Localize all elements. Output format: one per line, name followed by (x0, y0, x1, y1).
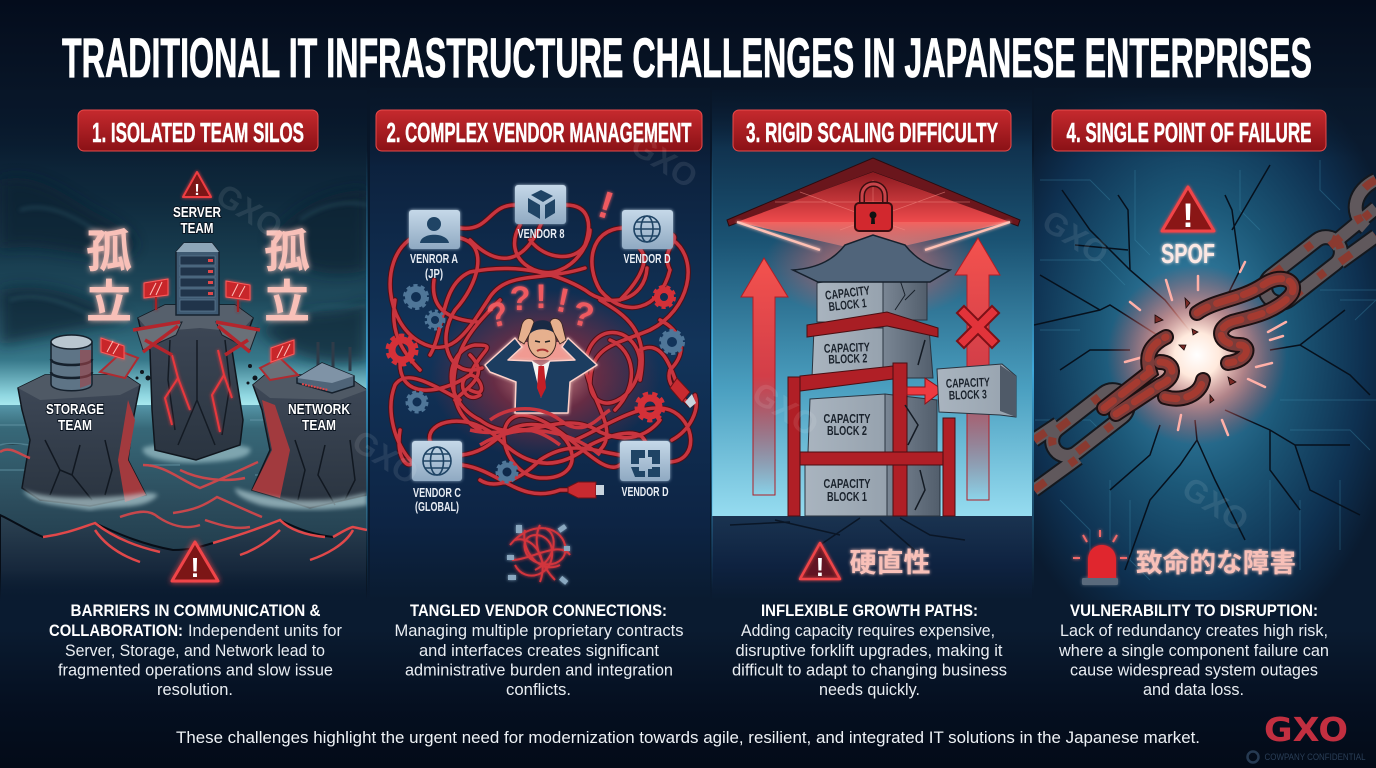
label: fatal failure: 致命的な障害 (1136, 548, 1296, 578)
heading badge 1: 1. ISOLATED TEAM SILOS (92, 117, 304, 148)
text block: inflexible: disruptive forklift upgrades, making it (736, 642, 1003, 660)
watermarks (210, 126, 1255, 539)
label: storage team: STORAGE (46, 401, 104, 418)
block 1 upper: BLOCK 1 (828, 296, 867, 314)
confusion marks: ! (535, 278, 547, 316)
block 3: CAPACITY (946, 375, 991, 391)
confusion marks: ? (510, 280, 530, 318)
gears (388, 286, 683, 482)
block 1 bottom: CAPACITY (824, 477, 871, 491)
block 2 lower: BLOCK 2 (827, 424, 867, 438)
text block: vulnerability: and data loss. (1143, 681, 1244, 699)
kanji right: 孤 (264, 225, 310, 277)
vendor box: C (412, 441, 462, 514)
icon: warning (1162, 187, 1214, 235)
label: SPOF: SPOF (1161, 238, 1215, 269)
block 2 upper (812, 325, 933, 378)
chain: steel links (1034, 180, 1376, 490)
watermarks: GXO (346, 423, 425, 492)
block 3 (937, 364, 1016, 417)
cracks (1034, 165, 1370, 570)
man glow (430, 290, 660, 460)
heading badge 1 (78, 110, 318, 151)
cables behind (390, 205, 696, 494)
vendor box: D top: VENDOR D (624, 252, 670, 266)
text block: tangled: conflicts. (506, 681, 571, 699)
tower cracks (905, 340, 925, 510)
icon: large warning (172, 542, 218, 583)
block 1 upper (817, 272, 927, 322)
foam behind islands (143, 442, 250, 463)
text block: barriers: fragmented operations and slow issue (58, 662, 333, 680)
kanji left: 立 (86, 276, 132, 328)
cliff: storage (18, 352, 146, 506)
block 1 bottom (805, 462, 940, 516)
illustration background (370, 88, 710, 600)
text block: vulnerability: cause widespread system outages (1070, 662, 1318, 680)
icon: server rack (176, 243, 219, 315)
icon: warning and rigidity label: ! (816, 552, 824, 582)
vendor box: D bottom: VENDOR D (622, 485, 668, 499)
panel: isolated team silos (0, 88, 367, 699)
icon: top warning: ! (194, 182, 200, 199)
front waves (0, 515, 367, 600)
block 2 lower (808, 394, 937, 452)
heading badge 4 (1052, 110, 1326, 151)
broken bridges centre (133, 322, 260, 355)
text block: vulnerability (1058, 602, 1329, 699)
debris fragments (1155, 298, 1236, 403)
illustration background (1034, 88, 1376, 600)
vendor box: A: VENROR A (410, 252, 458, 266)
tower of capacity blocks (788, 235, 1016, 516)
footer statement: These challenges highlight the urgent need for modernization towards agile, resilient, and integrated IT solutions in the Japanese market. (176, 729, 1200, 747)
watermarks: GXO (1176, 470, 1255, 539)
panel: single point of failure (1034, 88, 1376, 699)
arrow: right blocked (955, 238, 1000, 500)
confusion marks: ? (483, 294, 513, 336)
icon: network router (297, 342, 354, 393)
stressed man (485, 318, 597, 413)
watermarks: GXO (625, 126, 704, 195)
text block: inflexible: difficult to adapt to changing business (732, 662, 1007, 680)
text block: barriers: BARRIERS IN COMMUNICATION & (70, 602, 321, 620)
text block: barriers: Independent units for (188, 622, 342, 640)
text block: vulnerability: VULNERABILITY TO DISRUPTION: (1070, 602, 1318, 620)
text block: barriers: COLLABORATION: (49, 622, 183, 640)
block 2 upper: BLOCK 2 (828, 351, 868, 367)
heading badge 3 (733, 110, 1011, 151)
label: network team (288, 401, 350, 434)
block 3: BLOCK 3 (949, 387, 987, 403)
confusion marks: ! (553, 281, 572, 321)
text block: barriers (49, 602, 342, 699)
icon: warning and rigidity label (800, 543, 930, 582)
kanji right: 立 (264, 276, 310, 328)
text block: barriers: Server, Storage, and Network lead to (65, 642, 325, 660)
vendor box: C: VENDOR C (413, 486, 461, 500)
company confidential: COWPANY CONFIDENTIAL (1264, 752, 1366, 762)
pagoda roof (793, 235, 950, 282)
icon: top warning (183, 172, 211, 199)
block 2 lower: CAPACITY (824, 412, 871, 426)
debris (136, 364, 258, 384)
vendor box: B: VENDOR 8 (518, 227, 565, 241)
text block: barriers: resolution. (157, 681, 233, 699)
cliff: centre (138, 305, 253, 460)
text block: inflexible: Adding capacity requires expensive, (741, 622, 995, 640)
block 1 upper: CAPACITY (824, 283, 871, 303)
block 2 upper: CAPACITY (824, 340, 871, 356)
spark lines (1125, 262, 1286, 435)
text block: tangled (394, 602, 684, 699)
panel: rigid scaling difficulty (712, 88, 1032, 699)
text block: vulnerability: where a single component failure can (1058, 642, 1329, 660)
illustration background (712, 88, 1032, 600)
label: server team (173, 204, 221, 237)
label: server team: TEAM (180, 220, 214, 237)
heading badge 2: 2. COMPLEX VENDOR MANAGEMENT (386, 117, 692, 148)
arrow: pushing block out (907, 378, 943, 404)
circuit traces (1035, 160, 1376, 580)
text block: inflexible (732, 602, 1007, 699)
illustration: sea cliffs (0, 147, 367, 590)
logo: GXO: GXO (1264, 710, 1348, 749)
vendor box: C: (GLOBAL) (415, 500, 459, 514)
heading badge 3: 3. RIGID SCALING DIFFICULTY (746, 117, 998, 148)
icon: barrier signs (101, 279, 294, 362)
confusion marks: ! (593, 184, 618, 228)
text block: tangled: TANGLED VENDOR CONNECTIONS: (410, 602, 667, 620)
scaffold (788, 363, 955, 516)
heading badge 2 (376, 110, 702, 151)
text block: vulnerability: Lack of redundancy creates high risk, (1060, 622, 1328, 640)
text block: tangled: Managing multiple proprietary contracts (394, 622, 684, 640)
waves (0, 450, 262, 528)
burst glow (1107, 265, 1287, 445)
block 1 bottom: BLOCK 1 (827, 490, 867, 504)
icon: padlock (855, 184, 892, 231)
vendor box: B (515, 185, 566, 241)
vendor box: D top (622, 210, 673, 266)
watermarks: GXO (210, 176, 289, 245)
watermarks: GXO (746, 375, 825, 444)
label: storage team: TEAM (58, 417, 92, 434)
icon: small cable tangle (507, 524, 570, 585)
vendor box: A: (JP) (425, 267, 443, 281)
red band (807, 312, 938, 337)
panel: complex vendor management (370, 88, 710, 699)
kanji left: 孤 (86, 225, 132, 277)
arrow: left growth (741, 258, 788, 495)
cables over man (470, 409, 610, 455)
text block: tangled: administrative burden and integration (405, 662, 673, 680)
icon: alarm light (1073, 530, 1127, 585)
foam (23, 488, 367, 510)
confusion marks (483, 184, 618, 336)
plugs (568, 378, 696, 498)
icon: warning and rigidity label: 硬直性 (850, 548, 930, 578)
cliff: network (252, 358, 367, 508)
label: network team: NETWORK (288, 401, 350, 418)
text block: inflexible: needs quickly. (819, 681, 920, 699)
chain: broken rusty links (1104, 279, 1293, 414)
icon: large warning: ! (190, 552, 200, 583)
icon: warning: ! (1182, 197, 1194, 235)
text block: tangled: and interfaces creates significant (419, 642, 659, 660)
confusion marks: ? (568, 294, 598, 336)
icon: storage cylinder (51, 335, 92, 391)
vendor box: A (409, 210, 460, 281)
label: server team: SERVER (173, 204, 221, 221)
label: storage team (46, 401, 104, 434)
label: network team: TEAM (302, 417, 336, 434)
text block: inflexible: INFLEXIBLE GROWTH PATHS: (761, 602, 978, 620)
watermarks: GXO (1036, 203, 1115, 272)
vendor box: D bottom (620, 441, 670, 499)
ceiling with lock (727, 158, 1020, 253)
